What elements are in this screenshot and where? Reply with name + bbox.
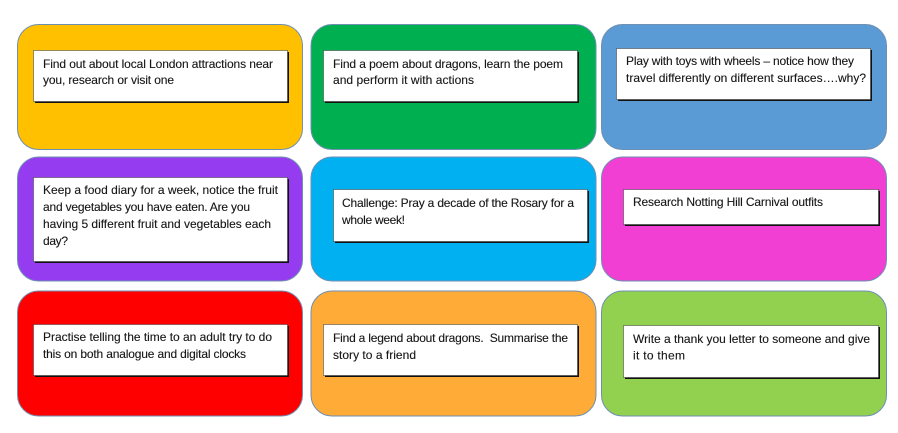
card: dragon legend <box>311 291 596 416</box>
text: poem task: Find a poem about dragons, learn the poem <box>333 57 563 71</box>
text: food diary task: Keep a food diary for a week, notice the fruit <box>43 183 279 197</box>
text: food diary task: having 5 different fruit and vegetables each <box>43 217 271 231</box>
text: letter task: it to them <box>633 348 685 362</box>
card: dragon poem <box>311 24 596 150</box>
text: attractions task: Find out about local London attractions near <box>43 57 273 71</box>
text: attractions task: you, research or visit one <box>43 73 174 87</box>
text: legend task: story to a friend <box>333 348 416 362</box>
text: Rosary task: whole week! <box>341 213 405 227</box>
text: wheels task: Play with toys with wheels – notice how they <box>626 54 854 68</box>
text: legend task <box>333 331 568 362</box>
card: telling the time <box>18 291 302 416</box>
text: wheels task: travel differently on different surfaces….why? <box>626 71 866 85</box>
text: letter task <box>633 332 870 362</box>
text: poem task <box>333 57 563 87</box>
text: Rosary task <box>341 196 574 227</box>
text: wheels task <box>626 54 866 85</box>
text: carnival task: Research Notting Hill Carnival outfits <box>633 195 823 209</box>
card: toys with wheels <box>602 24 886 150</box>
card: thank you letter <box>602 291 886 416</box>
text: time task: this on both analogue and digital clocks <box>43 347 246 361</box>
text: time task: Practise telling the time to an adult try to do <box>43 330 272 344</box>
text: letter task: Write a thank you letter to someone and give <box>633 332 870 346</box>
card: local London attractions <box>18 24 302 150</box>
text: food diary task <box>43 183 279 248</box>
text: legend task: Find a legend about dragons. Summarise the <box>333 331 568 345</box>
text: poem task: and perform it with actions <box>333 73 474 87</box>
text: food diary task: day? <box>43 234 68 248</box>
text: time task <box>43 330 272 361</box>
card: Notting Hill Carnival <box>602 157 886 281</box>
card: food diary <box>18 157 302 281</box>
text: food diary task: and vegetables you have eaten. Are you <box>43 200 250 214</box>
card: Rosary challenge <box>311 157 596 281</box>
text: Rosary task: Challenge: Pray a decade of the Rosary for a <box>342 196 574 210</box>
text: attractions task <box>43 57 273 87</box>
